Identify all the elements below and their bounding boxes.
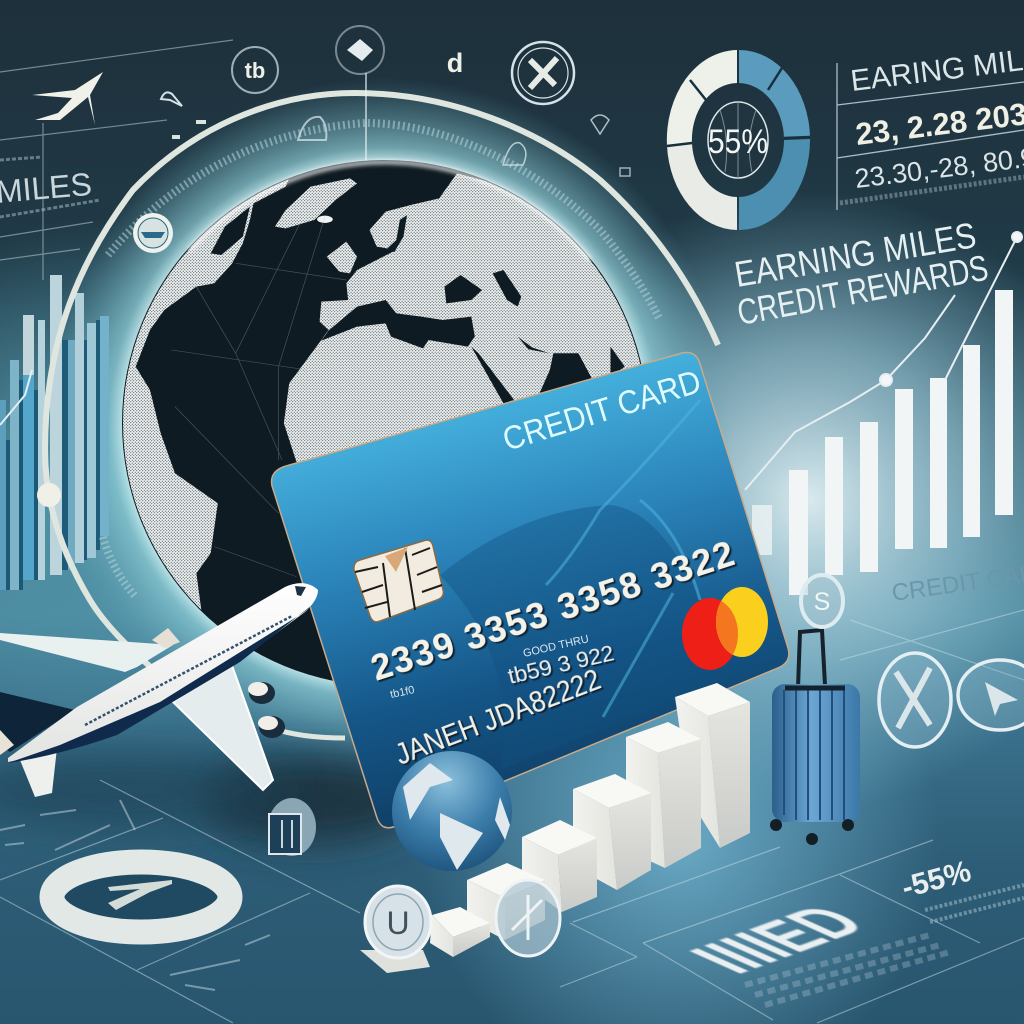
plane windows bbox=[85, 616, 292, 725]
card small number: tb59 3 922 bbox=[506, 640, 616, 689]
floor panel text bbox=[0, 800, 1024, 1005]
suitcase bbox=[770, 630, 860, 845]
ocean grid lines bbox=[171, 217, 346, 577]
ring node bbox=[37, 483, 61, 507]
plane tail stub bbox=[0, 730, 14, 755]
bar 6 bbox=[430, 907, 490, 957]
3d bars bbox=[430, 683, 750, 957]
top icons row bbox=[161, 26, 630, 176]
icon: crossed circle bbox=[879, 653, 951, 747]
left bar chart bbox=[0, 275, 109, 590]
sea: baltic bbox=[387, 215, 407, 252]
icon: small glyph bbox=[620, 168, 630, 176]
right bar chart bbox=[752, 290, 1013, 595]
card title: CREDIT CARD bbox=[498, 362, 705, 458]
small cylinder icon bbox=[268, 798, 316, 856]
sea: black sea bbox=[445, 275, 482, 303]
globe rim highlight bbox=[190, 162, 590, 260]
donut chart: 55% bbox=[708, 123, 768, 161]
plane near wing bbox=[173, 660, 273, 790]
continent: eurasia and africa bbox=[284, 173, 640, 462]
icon: letter d: d bbox=[447, 48, 463, 78]
icon: small dots bbox=[172, 122, 206, 137]
card chip bbox=[354, 540, 443, 622]
coin icons bbox=[360, 880, 560, 973]
sea: arabian bbox=[540, 353, 592, 393]
plane cockpit bbox=[295, 586, 306, 596]
icon: hatched blob bbox=[503, 143, 526, 165]
hatched orbit bands bbox=[103, 123, 660, 596]
plane engine 2 bbox=[258, 716, 285, 738]
credit card bbox=[272, 352, 789, 828]
icon: hatched blob bbox=[298, 117, 326, 140]
icon: circle badge 1: tb bbox=[245, 58, 265, 83]
floor ellipse icon bbox=[52, 862, 230, 932]
icon: plane outline top left bbox=[32, 72, 103, 125]
data table: earning miles bbox=[837, 42, 1024, 210]
sea: red sea bbox=[471, 347, 514, 403]
icon: crossed plane badge bbox=[512, 42, 574, 104]
text: miles bbox=[0, 157, 100, 217]
donut chart bbox=[667, 50, 810, 230]
dollar coin icon bbox=[801, 575, 843, 627]
dollar coin icon: S bbox=[814, 588, 830, 616]
sea: gulf bbox=[518, 337, 549, 353]
card logo bbox=[682, 587, 768, 670]
icon: small glyph bbox=[591, 115, 609, 134]
plane stabilizer bbox=[20, 748, 57, 797]
floor panel text: -55% bbox=[898, 855, 974, 905]
data table: earning miles: 23, 2.28 203 bbox=[854, 96, 1024, 152]
vertical pin line bbox=[365, 73, 367, 170]
bar 1 bbox=[675, 683, 750, 848]
right circle icons bbox=[879, 653, 1024, 747]
bar 3 bbox=[573, 774, 651, 890]
small circular icon bbox=[133, 213, 173, 253]
coin left: U bbox=[386, 905, 410, 941]
heading: earning miles credit rewards: EARNING MILES bbox=[732, 214, 979, 295]
icon: small glyph bbox=[161, 92, 182, 106]
globe bbox=[122, 158, 642, 681]
continent: iceland bbox=[317, 216, 333, 223]
sea: caspian bbox=[493, 270, 521, 307]
continent: britain bbox=[327, 242, 357, 273]
bar 2 bbox=[626, 722, 701, 868]
card small label: thru: GOOD THRU bbox=[522, 633, 590, 660]
continent: greenland bbox=[275, 178, 357, 228]
mini globe bbox=[392, 751, 512, 871]
floor panel text: IIIIED bbox=[670, 897, 886, 982]
icon: circle badge 1 bbox=[232, 47, 278, 93]
plane engine 1 bbox=[248, 682, 275, 704]
coin left bbox=[360, 886, 431, 973]
card swoosh bbox=[440, 505, 760, 770]
continent: hudson bay bbox=[211, 207, 250, 255]
line chart bbox=[745, 232, 1022, 490]
continent: top arctic sea bbox=[357, 173, 457, 230]
card holder name: JANEH JDA82222 bbox=[391, 663, 605, 772]
sea: bay bbox=[610, 346, 625, 373]
plane belly bbox=[8, 605, 312, 763]
sea: mediterranean bbox=[321, 300, 475, 348]
coin right bbox=[496, 880, 560, 956]
text: credit card faded: CREDIT CAI bbox=[890, 561, 1024, 607]
card number: 2339 3353 3358 3322 bbox=[366, 532, 739, 689]
plane tail bbox=[0, 692, 75, 752]
plane far wing bbox=[0, 633, 173, 672]
plane far engine bbox=[152, 628, 180, 648]
icon: circle badge 2 bbox=[336, 26, 384, 74]
card small label: tb1f0 bbox=[389, 684, 416, 701]
icon: plane circle bbox=[958, 660, 1024, 730]
bar 5 bbox=[467, 863, 545, 940]
big ring around globe bbox=[45, 93, 718, 738]
plane fuselage bbox=[8, 583, 318, 762]
continent: americas bbox=[123, 179, 289, 610]
airplane bbox=[0, 583, 318, 797]
bar 4 bbox=[522, 820, 597, 912]
